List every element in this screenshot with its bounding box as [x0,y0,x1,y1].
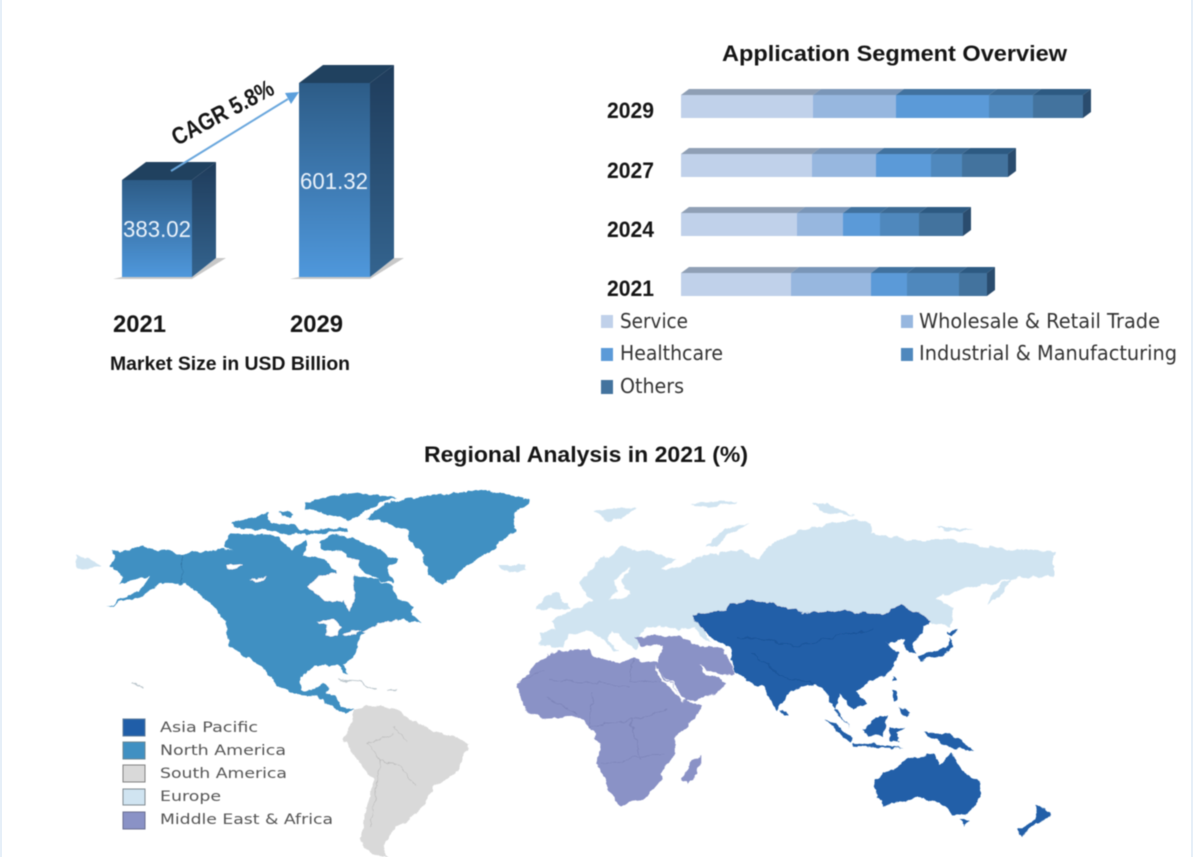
legend: application segments: Industrial & Manufacturing [919,341,1177,365]
heading: regional analysis: Regional Analysis in 2021 (%) [424,442,748,467]
label: year 2021: 2021 [113,311,166,338]
borders: South America countries [367,727,417,827]
stacked bar: 2021 [607,267,995,301]
region: Iceland [498,565,527,574]
legend: regions: Asia Pacific [160,720,258,736]
region: North America [107,490,532,713]
legend: application segments [601,309,1177,398]
bar: 2029 value 601.32 [290,65,404,279]
heading: application segment overview: Application Segment Overview [722,41,1068,66]
legend: regions: South America [160,766,287,782]
bar: 2021 value 383.02 [113,162,226,279]
border: Alaska Canada [181,554,183,583]
water: Red Sea gap [654,665,684,702]
islands: Caribbean and Hawaii [132,680,397,691]
label: year 2029: 2029 [290,311,343,338]
stacked bar: 2029: 2029 [607,98,654,123]
map: Eurasia, Africa and Oceania [519,501,1054,835]
map: Americas [76,490,532,857]
bar: 2029 value 601.32: 601.32 [300,168,368,194]
legend: regions [123,719,333,829]
legend: application segments: Wholesale & Retail Trade [919,309,1160,333]
panel: application segment overview [601,41,1177,398]
stacked bar: 2024: 2024 [607,217,655,242]
borders: Asia interior [738,630,872,683]
water: Hudson Bay and Great Lakes [227,558,397,680]
stacked bar: 2027: 2027 [607,158,654,183]
panel: market size bar chart [110,65,404,375]
region: Europe and Russia [537,501,1054,652]
borders: Africa countries [519,658,667,763]
legend: application segments: Others [620,374,684,398]
stacked bar: 2024 [607,207,971,242]
legend: regions: Middle East & Africa [160,812,333,828]
label: CAGR 5.8%: CAGR 5.8% [167,75,279,151]
water: Baltic, Caspian [608,567,779,626]
panel: regional analysis map [76,442,1054,857]
stacked bar: 2029 [607,89,1091,123]
region: South America [343,705,469,857]
legend: regions: Europe [160,789,221,805]
bar: 2021 value 383.02: 383.02 [123,216,191,242]
arrow: CAGR growth [171,92,299,171]
legend: application segments: Healthcare [620,341,723,365]
region: Asia Pacific [691,600,1050,835]
region: far east Russia fragment [76,555,103,568]
caption: market size unit: Market Size in USD Billion [110,354,350,375]
legend: application segments: Service [620,309,688,333]
stacked bar: 2021: 2021 [607,276,654,301]
legend: regions: North America [160,743,286,759]
stacked bar: 2027 [607,148,1016,183]
region: Middle East and Africa [519,635,734,805]
